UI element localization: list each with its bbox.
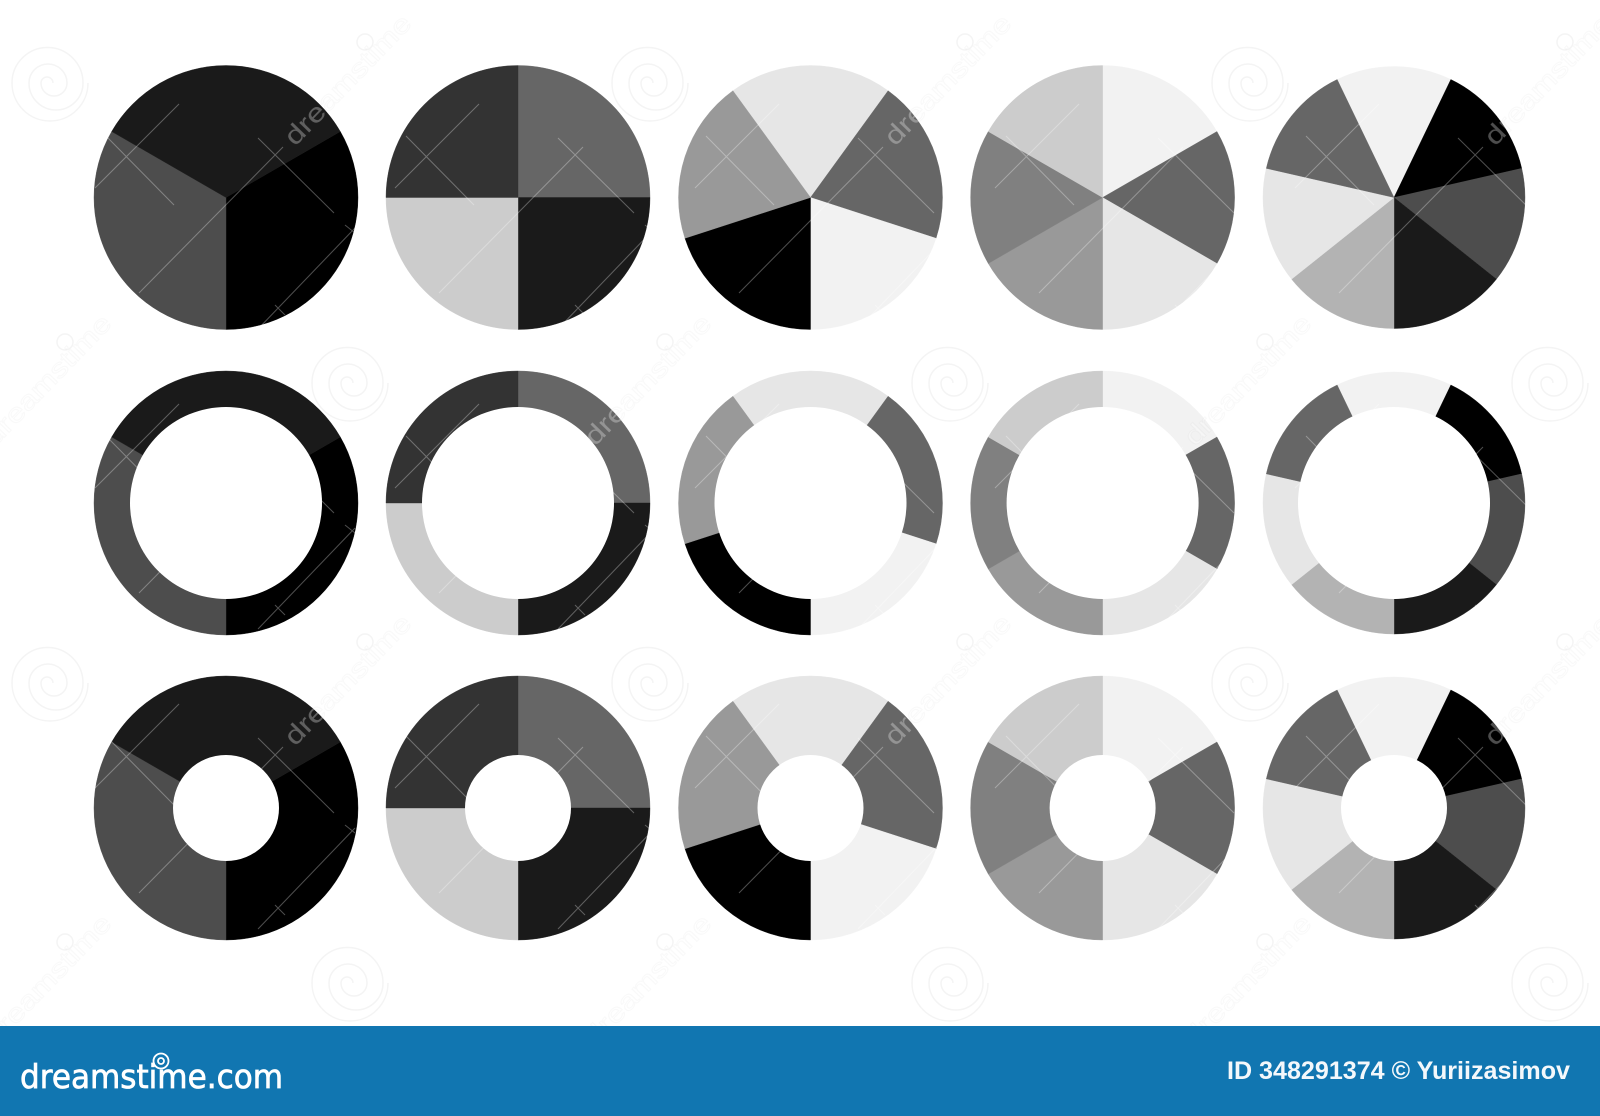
- segment 6: [1263, 779, 1394, 890]
- donut chart: 3 segments: [94, 676, 358, 940]
- segment bottom left: [386, 198, 518, 330]
- segment 1: [733, 676, 888, 808]
- ring chart: 6 segments: [971, 371, 1235, 635]
- logo wordmark: dreamstime.com: [20, 1057, 283, 1096]
- segment 4: [685, 503, 810, 635]
- ring hole: [422, 407, 614, 599]
- watermark text: dreamstime: [878, 8, 1017, 151]
- watermark text: dreamstime: [1478, 8, 1600, 151]
- pie chart: 4 segments: [386, 66, 650, 330]
- segment top: [112, 65, 340, 198]
- segment 7: [1266, 690, 1394, 808]
- watermark text: dreamstime: [278, 8, 417, 151]
- segment left: [94, 132, 226, 330]
- segment top: [112, 371, 340, 503]
- segment 3: [810, 808, 936, 940]
- segment 5: [678, 396, 810, 544]
- segment 3: [1394, 474, 1525, 585]
- ring chart: 5 segments: [678, 371, 943, 635]
- segment 2: [810, 701, 943, 849]
- segment 3: [1103, 198, 1217, 330]
- segment 2: [1103, 132, 1235, 264]
- segment 7: [1266, 79, 1394, 198]
- segment 4: [1394, 198, 1496, 328]
- segment 2: [810, 91, 943, 238]
- segment 3: [1394, 779, 1525, 890]
- segment top left: [386, 676, 518, 808]
- segment 2: [1394, 79, 1522, 198]
- segment 1: [1103, 371, 1217, 503]
- watermark text: dreamstime: [1178, 308, 1317, 451]
- segment 2: [1394, 690, 1522, 808]
- segment left: [94, 742, 226, 940]
- watermark text: dreamstime: [1478, 608, 1600, 751]
- segment 5: [678, 91, 810, 238]
- segment top right: [518, 371, 650, 503]
- ring hole: [130, 407, 322, 599]
- ring chart: 4 segments: [386, 371, 650, 635]
- segment 4: [988, 198, 1103, 330]
- segment 4: [1394, 503, 1496, 634]
- watermark text: dreamstime: [278, 608, 417, 751]
- segment 4: [685, 808, 810, 940]
- footer bar: [0, 1026, 1600, 1116]
- ring hole: [714, 407, 906, 599]
- segment top: [112, 676, 340, 808]
- segment 3: [1394, 168, 1525, 279]
- segment 1: [733, 65, 888, 198]
- segment 6: [1263, 168, 1394, 279]
- ring chart: 3 segments: [94, 371, 358, 635]
- segment 1: [1103, 66, 1217, 198]
- ring hole: [1298, 407, 1490, 599]
- segment bottom right: [518, 503, 650, 635]
- segment 3: [810, 198, 936, 330]
- donut hole: [465, 755, 571, 861]
- segment 4: [1394, 808, 1496, 939]
- pie chart: 3 segments: [94, 65, 358, 330]
- segment 6: [988, 676, 1103, 808]
- donut chart: 7 segments: [1263, 677, 1525, 939]
- segment 5: [1292, 503, 1394, 634]
- segment 5: [971, 742, 1103, 874]
- watermark text: dreamstime: [878, 608, 1017, 751]
- segment 3: [1103, 503, 1217, 635]
- segment 6: [1263, 474, 1394, 585]
- segment left: [94, 437, 226, 635]
- watermark text: dreamstime: [578, 308, 717, 451]
- segment 1: [1337, 66, 1451, 198]
- pie chart: 7 segments: [1263, 66, 1525, 328]
- donut chart: 5 segments: [678, 676, 943, 940]
- segment 6: [988, 66, 1103, 198]
- segment 5: [1292, 198, 1394, 328]
- segment bottom left: [386, 808, 518, 940]
- segment 2: [810, 396, 943, 544]
- segment 5: [678, 701, 810, 849]
- segment 1: [1337, 372, 1451, 503]
- segment 5: [971, 437, 1103, 569]
- segment 3: [810, 503, 936, 635]
- donut hole: [173, 755, 279, 861]
- watermark text: dreamstime: [1178, 908, 1317, 1051]
- ring chart: 7 segments: [1263, 372, 1525, 634]
- segment 1: [1337, 677, 1451, 808]
- footer logo: [20, 1054, 283, 1096]
- segment 4: [988, 808, 1103, 940]
- segment 6: [988, 371, 1103, 503]
- segment top left: [386, 66, 518, 198]
- segment 5: [971, 132, 1103, 264]
- segment 4: [685, 198, 810, 330]
- segment bottom right: [518, 198, 650, 330]
- pie chart: 6 segments: [971, 66, 1235, 330]
- pie chart: 5 segments: [678, 65, 943, 330]
- segment top right: [518, 676, 650, 808]
- donut chart: 4 segments: [386, 676, 650, 940]
- segment 2: [1103, 437, 1235, 569]
- donut hole: [1050, 755, 1156, 861]
- segment 5: [1292, 808, 1394, 939]
- segment 2: [1103, 742, 1235, 874]
- segment top right: [518, 66, 650, 198]
- logo spiral icon: [154, 1054, 168, 1068]
- segment bottom right: [518, 808, 650, 940]
- segment 1: [733, 371, 888, 503]
- segment right: [226, 437, 358, 635]
- segment right: [226, 132, 358, 330]
- watermark text: dreamstime: [578, 908, 717, 1051]
- donut hole: [1341, 755, 1447, 861]
- segment 3: [1103, 808, 1217, 940]
- segment 4: [988, 503, 1103, 635]
- segment right: [226, 742, 358, 940]
- segment bottom left: [386, 503, 518, 635]
- segment 1: [1103, 676, 1217, 808]
- image ID and credit: ID 348291374 © Yuriizasimov: [1227, 1057, 1570, 1085]
- segment top left: [386, 371, 518, 503]
- donut hole: [758, 755, 864, 861]
- segment 2: [1394, 385, 1522, 503]
- donut chart: 6 segments: [971, 676, 1235, 940]
- ring hole: [1007, 407, 1199, 599]
- segment 7: [1266, 385, 1394, 503]
